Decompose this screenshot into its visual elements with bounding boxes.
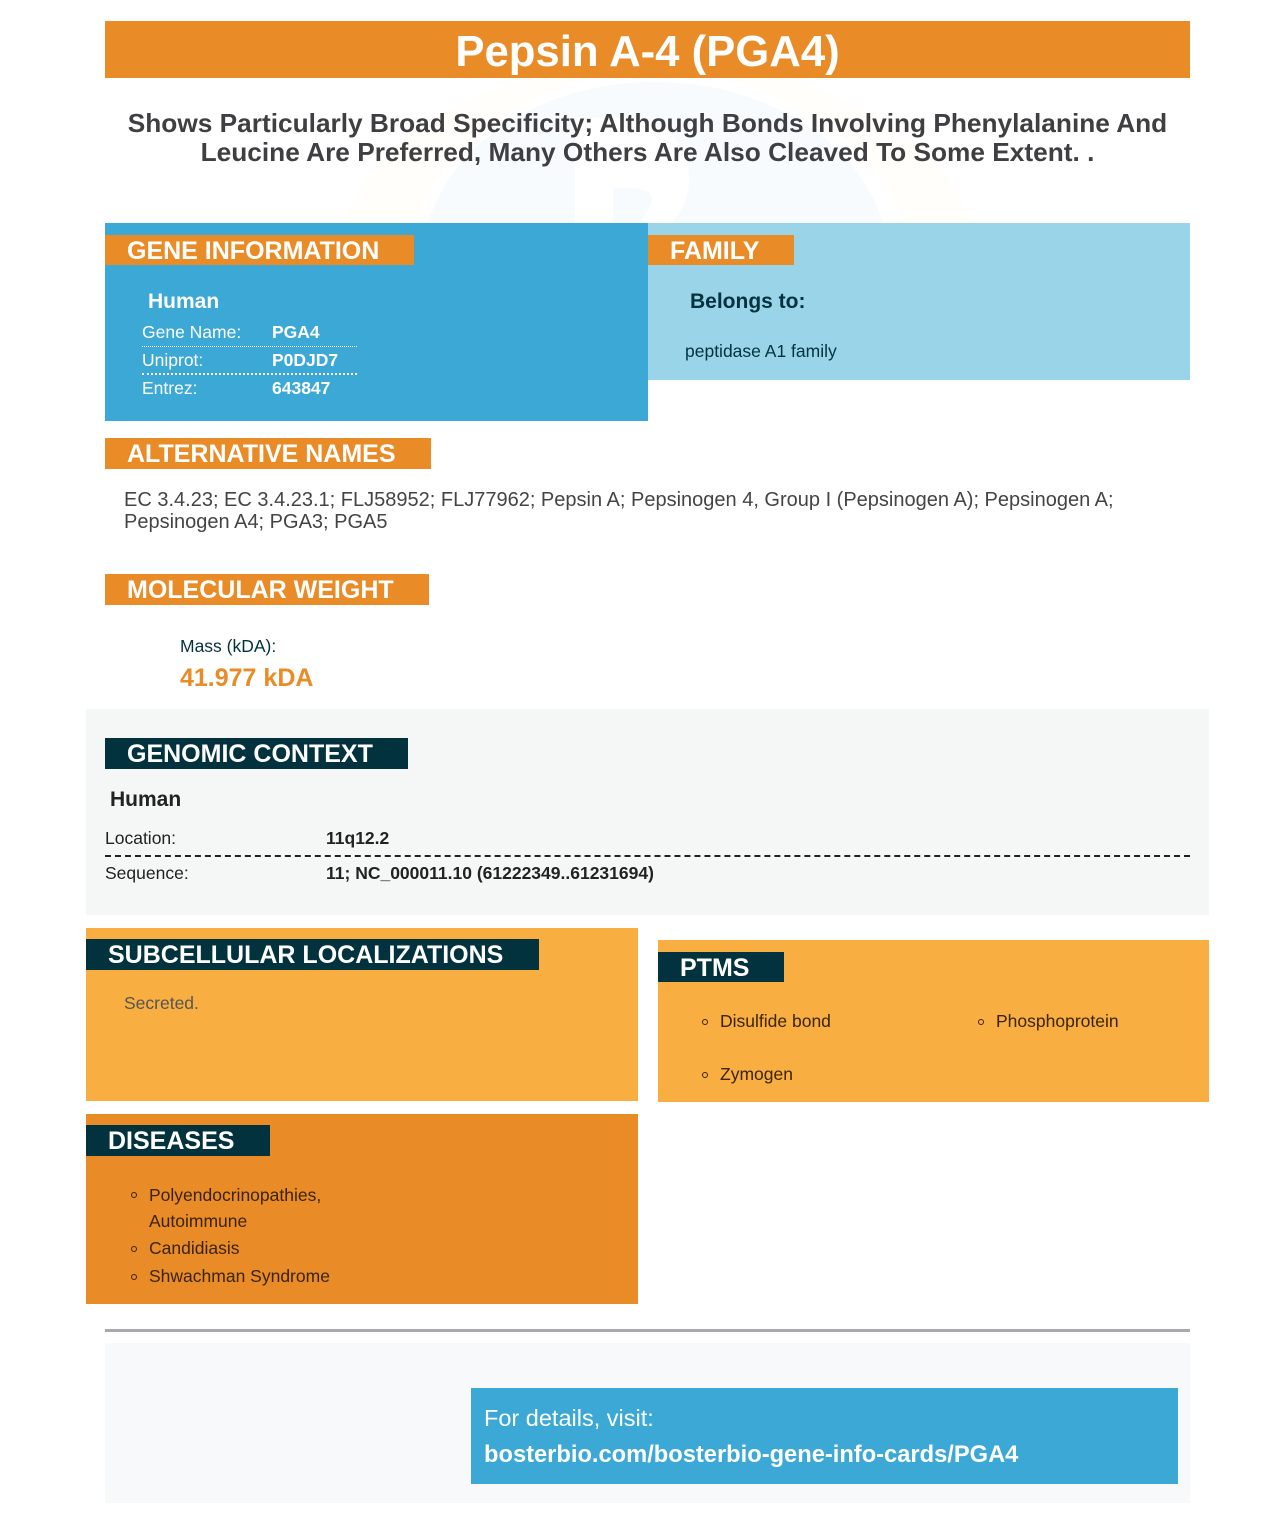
disease: polyendocrinopathies: Polyendocrinopathies, — [149, 1185, 321, 1205]
gene info table — [142, 322, 357, 398]
panel: subcellular localizations — [86, 928, 638, 1101]
alternative names text: Pepsinogen A4; PGA3; PGA5 — [124, 511, 388, 533]
title banner: Pepsin A-4 (PGA4) — [455, 27, 840, 76]
species label: Human — [148, 290, 219, 313]
subtitle: Shows Particularly Broad Specificity; Although Bonds Involving Phenylalanine And — [128, 108, 1167, 138]
belongs to label: Belongs to: — [690, 290, 806, 313]
callout url: bosterbio.com/bosterbio-gene-info-cards/PGA4 — [484, 1442, 1018, 1468]
subtitle — [128, 108, 1167, 167]
heading: subcellular localizations: SUBCELLULAR LOCALIZATIONS — [108, 941, 503, 969]
alternative names text: EC 3.4.23; EC 3.4.23.1; FLJ58952; FLJ77962; Pepsin A; Pepsinogen 4, Group I (Pepsinogen A); Pepsinogen A; — [124, 489, 1114, 511]
title banner — [105, 21, 1190, 78]
heading: ptms: PTMS — [680, 954, 749, 982]
heading: ptms — [658, 952, 784, 982]
heading: diseases — [86, 1125, 270, 1156]
heading: molecular weight: MOLECULAR WEIGHT — [127, 576, 394, 604]
gene info table: Uniprot: — [142, 350, 203, 370]
heading: gene information: GENE INFORMATION — [127, 237, 379, 265]
heading: family: FAMILY — [670, 237, 759, 265]
callout label: For details, visit: — [484, 1405, 654, 1431]
disease: shwachman syndrome: Shwachman Syndrome — [149, 1266, 330, 1286]
panel: ptms — [658, 940, 1209, 1102]
ptm: zymogen: Zymogen — [720, 1064, 793, 1084]
heading: alternative names: ALTERNATIVE NAMES — [127, 440, 396, 468]
localization text: Secreted. — [124, 993, 199, 1013]
panel: genomic context — [86, 709, 1209, 915]
species label: Human — [110, 788, 181, 811]
location row: Location: — [105, 828, 176, 848]
disease: candidiasis: Candidiasis — [149, 1238, 239, 1258]
mass value: 41.977 kDA — [180, 664, 313, 692]
panel: family — [648, 223, 1190, 380]
location value: 11q12.2 — [326, 828, 389, 848]
panel: gene information — [105, 223, 648, 421]
gene info table: Entrez: — [142, 378, 197, 398]
disease: polyendocrinopathies: Autoimmune — [149, 1211, 247, 1231]
ptm: disulfide bond: Disulfide bond — [720, 1011, 831, 1031]
gene info table: P0DJD7 — [272, 350, 338, 370]
family name: peptidase A1 family — [685, 341, 837, 361]
mass label: Mass (kDA): — [180, 636, 276, 656]
callout: details link — [471, 1388, 1178, 1484]
watermark logo — [0, 0, 1288, 230]
sequence row: Sequence: — [105, 863, 189, 883]
heading: genomic context: GENOMIC CONTEXT — [127, 740, 373, 768]
footer panel — [105, 1343, 1190, 1503]
panel: diseases — [86, 1114, 638, 1304]
heading: diseases: DISEASES — [108, 1127, 234, 1155]
alternative names text — [124, 489, 1114, 533]
gene info table: Gene Name: — [142, 322, 241, 342]
gene info table: PGA4 — [272, 322, 320, 342]
subtitle: Leucine Are Preferred, Many Others Are Also Cleaved To Some Extent. . — [201, 137, 1094, 167]
sequence value: 11; NC_000011.10 (61222349..61231694) — [326, 863, 654, 883]
ptm: phosphoprotein: Phosphoprotein — [996, 1011, 1119, 1031]
disease: polyendocrinopathies — [131, 1185, 321, 1231]
heading: family — [648, 235, 794, 265]
gene info table: 643847 — [272, 378, 330, 398]
